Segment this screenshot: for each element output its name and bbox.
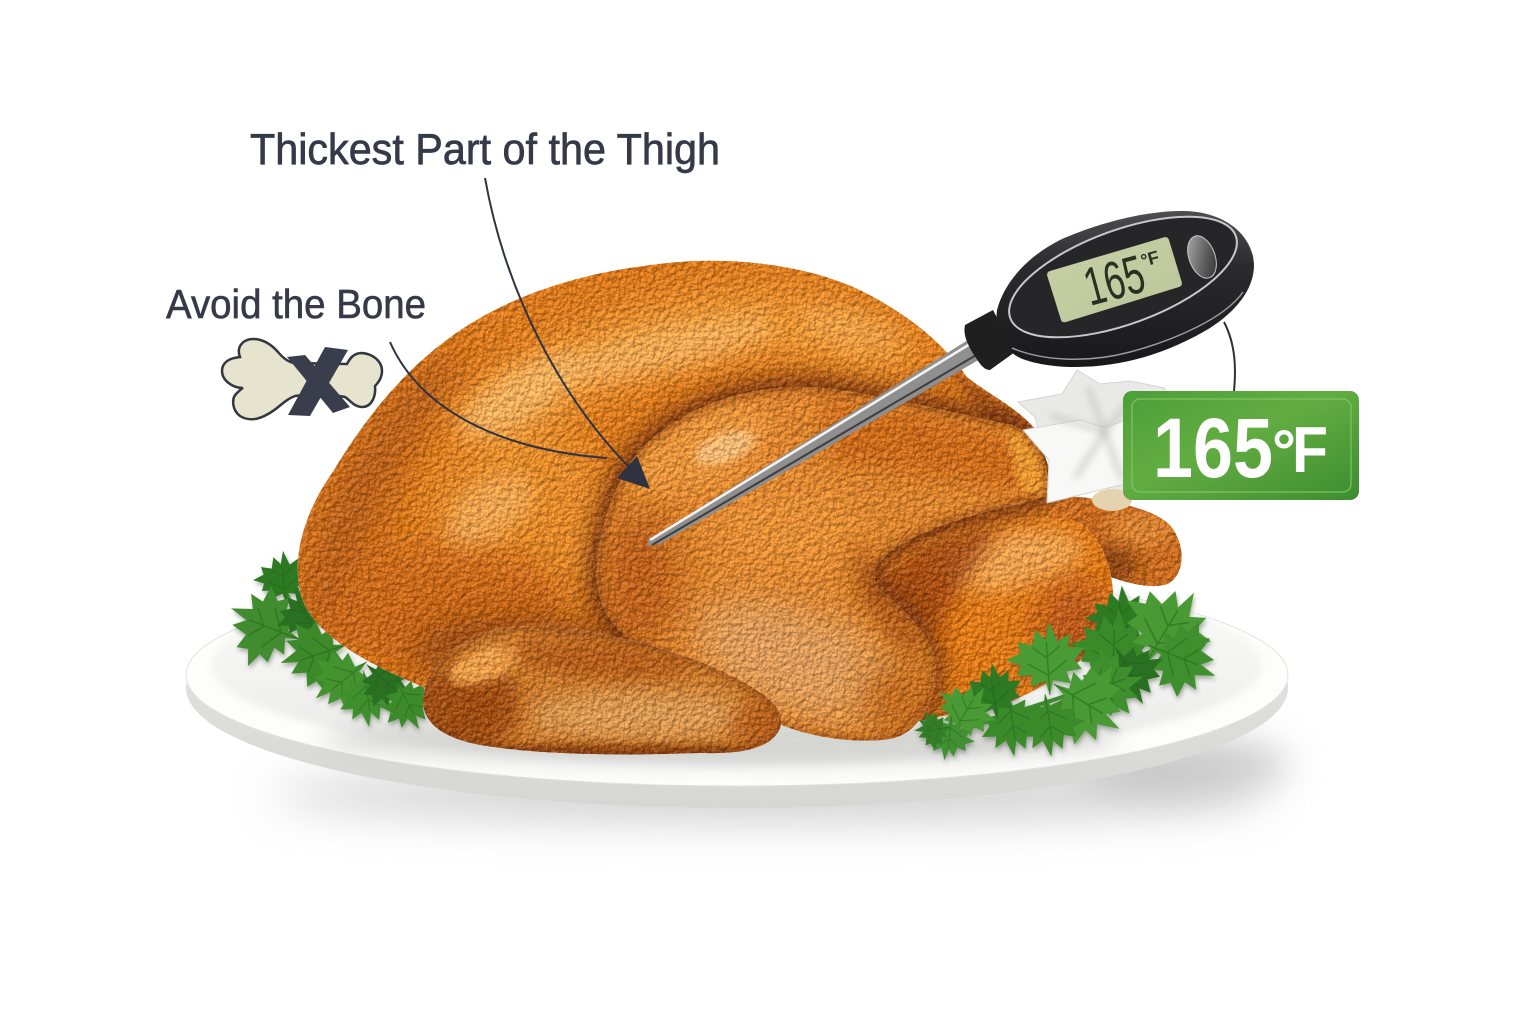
plate [186, 564, 1288, 808]
arrow: thigh label to thigh [485, 178, 650, 489]
icon: crossed-out bone [222, 339, 382, 419]
badge: 165°F: 165 [1153, 401, 1273, 495]
turkey thigh [590, 380, 1060, 750]
handle body [994, 192, 1254, 367]
label: Avoid the Bone: Avoid the Bone [166, 281, 426, 327]
badge: 165°F: F [1292, 413, 1328, 486]
display: °F [1139, 247, 1161, 271]
probe [648, 340, 982, 546]
turkey wing [423, 626, 782, 754]
plate shadow [270, 735, 1290, 821]
parsley: right garnish [911, 565, 1231, 763]
display: 165 [1078, 244, 1151, 318]
turkey far drumstick [876, 516, 1114, 721]
button [1182, 232, 1222, 282]
paper frill on drumstick [1018, 370, 1170, 511]
thermometer [648, 192, 1254, 546]
turkey body [298, 260, 1060, 688]
label: Thickest Part of the Thigh: Thickest Part of the Thigh [250, 125, 720, 174]
parsley: left garnish [215, 548, 448, 741]
back right leg [1047, 496, 1182, 586]
badge: 165°F [1123, 391, 1359, 500]
connector: thermometer to badge [1224, 322, 1235, 391]
badge: 165°F: ° [1272, 418, 1296, 485]
arrow: bone label to thigh [390, 342, 607, 458]
collar [964, 310, 1015, 370]
